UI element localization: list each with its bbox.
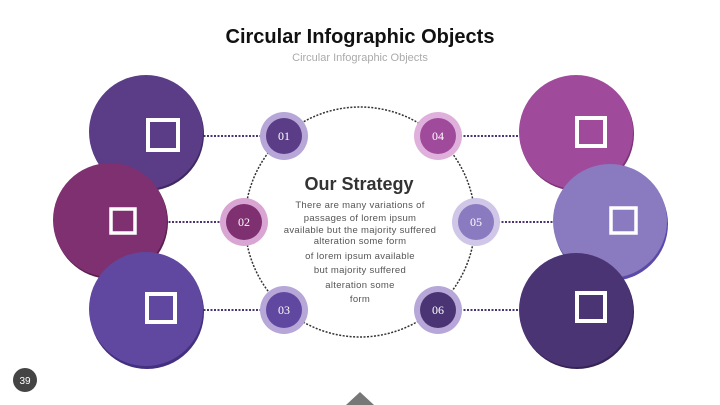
left big circles <box>53 75 204 369</box>
page number: 39 <box>19 376 31 387</box>
number badges: 03 <box>278 303 290 317</box>
body text: form <box>350 294 370 305</box>
number badges: 01 <box>278 129 290 143</box>
page number <box>13 368 37 392</box>
heading: our strategy: Our Strategy <box>304 174 414 194</box>
dashed ring <box>245 107 475 337</box>
title: Circular Infographic Objects <box>226 26 494 48</box>
right big circles <box>519 75 668 369</box>
body text <box>284 200 436 305</box>
body text: There are many variations of <box>295 200 425 211</box>
number badges: 05 <box>470 215 482 229</box>
number badges: 04 <box>432 129 444 143</box>
body text: available but the majority suffered <box>284 225 436 236</box>
body text: alteration some form <box>314 236 406 247</box>
number badges: 02 <box>238 215 250 229</box>
subtitle: Circular Infographic Objects <box>292 52 428 64</box>
body text: of lorem ipsum available <box>305 251 415 262</box>
body text: alteration some <box>325 280 395 291</box>
body text: but majority suffered <box>314 265 406 276</box>
number badges <box>220 112 500 334</box>
bottom triangle <box>346 392 374 405</box>
body text: passages of lorem ipsum <box>304 213 416 224</box>
connector lines <box>165 136 555 310</box>
number badges: 06 <box>432 303 444 317</box>
